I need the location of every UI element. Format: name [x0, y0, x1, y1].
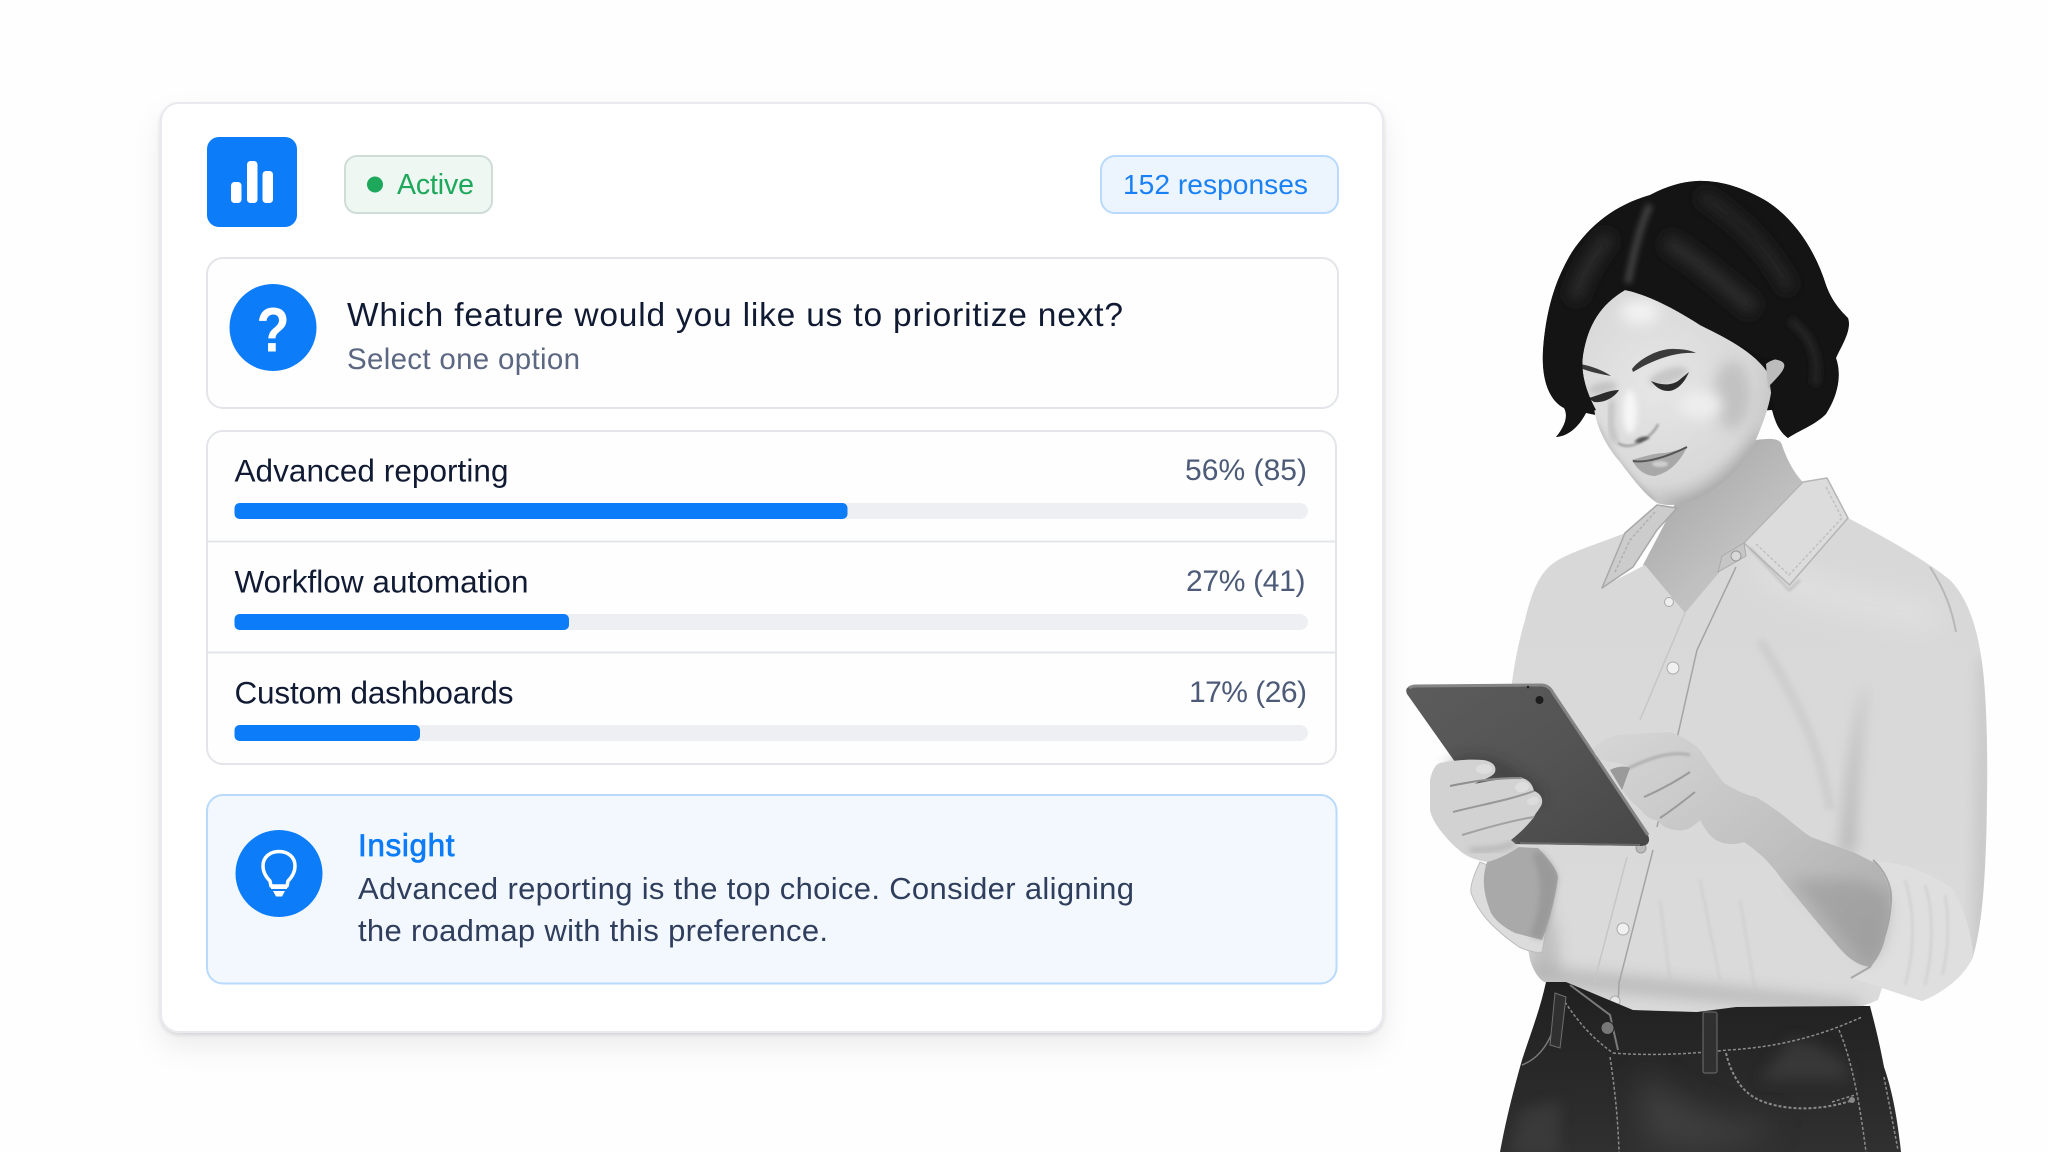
- lips: [1632, 447, 1687, 476]
- tablet: [1406, 685, 1649, 846]
- shirt: [1510, 518, 1990, 1015]
- shirt placket and buttons: [1594, 567, 1736, 1008]
- left forearm and cuff: [1471, 847, 1558, 952]
- option: custom dashboards: Custom dashboards: [234, 674, 514, 710]
- option: custom dashboards: 17% (26): [1189, 676, 1307, 709]
- left hand: [1430, 760, 1542, 862]
- status badge: active: Active: [397, 169, 474, 201]
- hair, front strands: [1543, 181, 1849, 438]
- badge: response count: 152 responses: [1123, 168, 1308, 200]
- insight body: the roadmap with this preference.: [358, 913, 828, 948]
- face: [1580, 290, 1772, 520]
- option: workflow automation: [234, 564, 1308, 630]
- status badge: active: [345, 156, 492, 213]
- right rolled sleeve: [1851, 860, 1973, 1001]
- eyebrows: [1632, 349, 1696, 372]
- icon: question mark: ?: [256, 296, 290, 365]
- callout: insight: [207, 795, 1336, 984]
- insight heading: Insight: [358, 827, 455, 863]
- panel: question: [207, 258, 1338, 408]
- option: workflow automation: 27% (41): [1186, 565, 1306, 598]
- option: workflow automation: Workflow automation: [234, 564, 528, 600]
- eyes: [1651, 372, 1689, 391]
- panel: poll results: [207, 431, 1336, 764]
- option: advanced reporting: Advanced reporting: [234, 452, 508, 488]
- icon: bar chart: [207, 137, 297, 227]
- question hint: Select one option: [347, 343, 580, 376]
- option: advanced reporting: [234, 452, 1308, 519]
- icon: question mark: [230, 284, 316, 371]
- insight body: [358, 871, 1134, 948]
- jeans: [1500, 982, 1901, 1152]
- option: custom dashboards: [234, 674, 1308, 741]
- panel: survey card: [161, 103, 1383, 1032]
- hair, back layer: [1543, 181, 1849, 438]
- right arm and hand: [1594, 732, 1890, 967]
- shirt collar: [1602, 478, 1848, 590]
- option: advanced reporting: 56% (85): [1185, 454, 1307, 487]
- question text: Which feature would you like us to prioritize next?: [347, 297, 1123, 334]
- ear: [1766, 358, 1796, 388]
- nose: [1618, 424, 1658, 446]
- icon: light bulb: [236, 830, 322, 917]
- badge: response count: [1101, 156, 1338, 213]
- neck and chest: [1643, 439, 1835, 615]
- photo: woman using a tablet: [1406, 181, 1990, 1152]
- insight body: Advanced reporting is the top choice. Consider aligning: [358, 871, 1134, 906]
